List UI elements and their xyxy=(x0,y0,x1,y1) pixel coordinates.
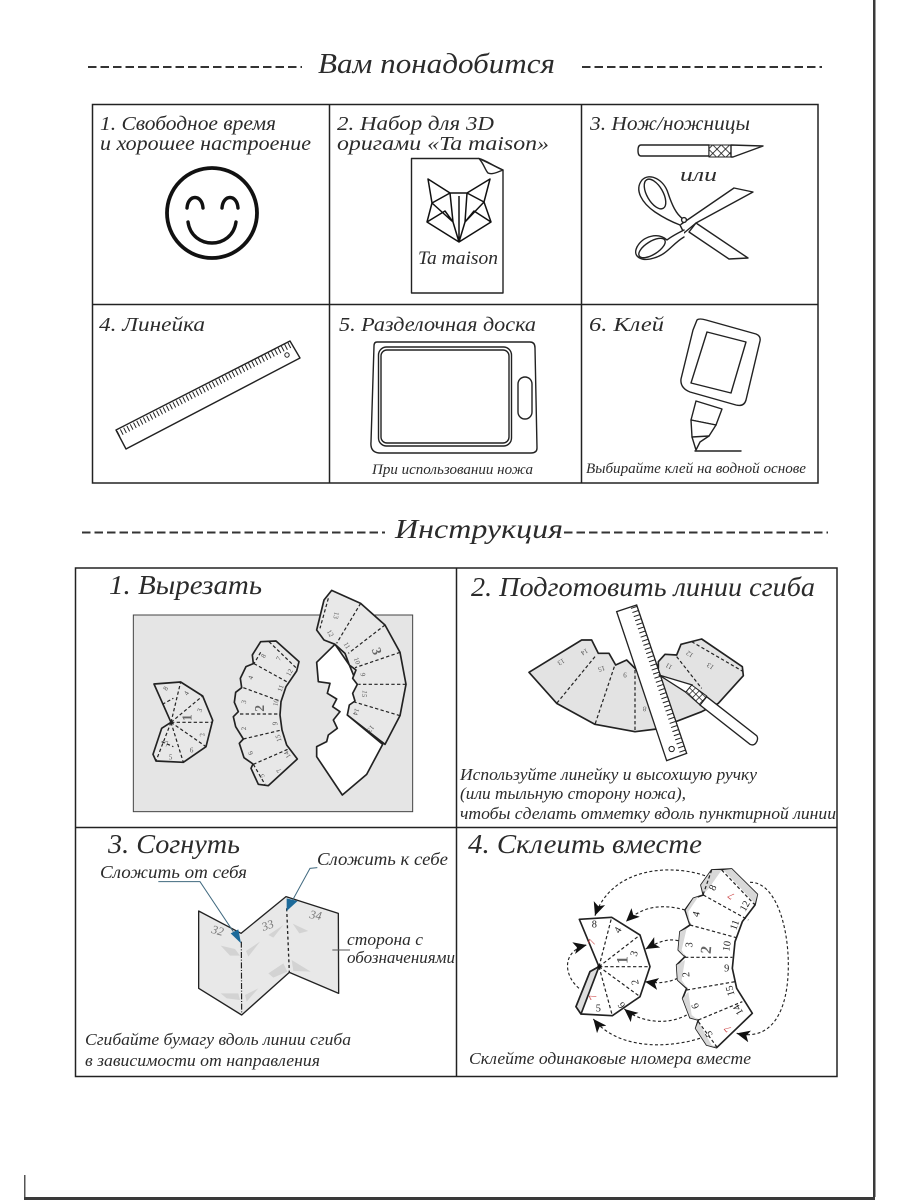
net 1: 2 xyxy=(198,732,207,737)
net 1: 7 xyxy=(587,938,599,947)
net 1: 8 xyxy=(592,920,597,931)
step 2 note: чтобы сделать отметку вдоль пунктирной линии xyxy=(460,804,836,823)
net 2: 2 xyxy=(698,945,715,955)
net 1 xyxy=(153,682,213,762)
heading: instructions: Инструкция xyxy=(394,514,563,544)
step 4: glue together: 4. Склеить вместе xyxy=(468,829,702,859)
net 3: 13 xyxy=(331,611,341,620)
step 2: prepare fold lines xyxy=(459,572,836,823)
heading: what you will need: Вам понадобится xyxy=(318,48,555,80)
item 3: knife and scissors: 3. Нож/ножницы xyxy=(589,113,750,135)
net 2: 2 xyxy=(681,971,693,978)
panel: instruction grid xyxy=(75,568,837,1076)
label: printed side xyxy=(347,930,455,967)
note: water-based glue: Выбирайте клей на водной основе xyxy=(586,461,806,477)
net 1: 1 xyxy=(179,714,194,721)
step 1: cut out: 1. Вырезать xyxy=(109,570,262,600)
step 3: fold: 3. Согнуть xyxy=(107,829,240,859)
scored paper net: 8 xyxy=(642,704,647,713)
illustration: numbered nets with arrows xyxy=(567,869,788,1048)
net 1: 4 xyxy=(182,689,191,697)
net 3: 15 xyxy=(360,690,369,698)
net 3: 10 xyxy=(352,656,362,666)
illustration: folded paper strip: 32 xyxy=(209,922,225,939)
net 2: 7 xyxy=(275,655,284,662)
step 2: prepare fold lines: 2. Подготовить линии сгиба xyxy=(471,572,815,602)
net 2: 3 xyxy=(240,699,248,704)
step 3: fold xyxy=(85,829,455,1070)
note: when using a knife: При использовании ножа xyxy=(371,462,533,478)
icon: glue bottle xyxy=(681,319,760,451)
icon: cutting board xyxy=(371,342,537,453)
icon: smiley face xyxy=(167,168,257,258)
item 2: origami kit xyxy=(337,113,549,293)
scored paper net xyxy=(529,639,743,732)
icon: knife xyxy=(659,675,758,745)
item 3: knife and scissors xyxy=(589,113,763,261)
net 3: 12 xyxy=(325,628,336,639)
illustration: folded paper strip xyxy=(158,868,350,1015)
net 1: 1 xyxy=(615,956,632,964)
net 2: 8 xyxy=(259,652,268,660)
net 1 xyxy=(576,917,650,1016)
net 1: 8 xyxy=(162,685,171,692)
net 1: 4 xyxy=(612,925,625,935)
item 2: origami kit: оригами «Ta maison» xyxy=(337,133,549,155)
step 2 note: Используйте линейку и высохшую ручку xyxy=(459,765,757,784)
blue fold markers xyxy=(158,868,317,943)
step 3 note xyxy=(85,1030,351,1070)
net 2: 11 xyxy=(728,919,742,932)
net 2: 10 xyxy=(721,940,734,952)
panel: supplies grid xyxy=(92,104,818,483)
item 6: glue: 6. Клей xyxy=(589,314,664,336)
icon: ruler xyxy=(617,605,687,761)
item 2: origami kit: 2. Набор для 3D xyxy=(337,113,495,135)
net 1: 3 xyxy=(195,707,204,713)
illustration: folded paper strip: 34 xyxy=(308,907,323,923)
net 2: 12 xyxy=(738,899,753,914)
net 2: 10 xyxy=(271,698,281,707)
net 2: 6 xyxy=(690,1002,702,1010)
net 3: 13 xyxy=(365,723,376,734)
item 6: glue xyxy=(586,314,806,477)
label: fold away: Сложить от себя xyxy=(100,862,247,882)
net 2: 7 xyxy=(275,766,283,774)
label: fold toward: Сложить к себе xyxy=(317,849,448,869)
net 2: 7 xyxy=(723,1023,734,1034)
item 1: free time and good mood: 1. Свободное время xyxy=(100,113,276,135)
scored paper net: 12 xyxy=(684,648,695,659)
net 1: 2 xyxy=(630,979,642,986)
step 2 note xyxy=(459,765,836,823)
net 2: 9 xyxy=(724,964,729,975)
grey cutting sheet with three nets xyxy=(133,590,413,812)
step 1: cut out xyxy=(109,570,413,812)
net 1: 6 xyxy=(190,747,194,755)
scored paper net: 9 xyxy=(623,670,627,678)
net 3: 11 xyxy=(342,641,352,651)
item 4: ruler: 4. Линейка xyxy=(99,314,205,336)
net 2: 2 xyxy=(240,726,248,731)
net 1: 7 xyxy=(588,992,600,1001)
net 1: 5 xyxy=(596,1004,601,1015)
illustration: folded paper strip: 33 xyxy=(259,917,276,934)
step 3 note: Сгибайте бумагу вдоль линии сгиба xyxy=(85,1030,351,1049)
net 3: 9 xyxy=(358,672,367,678)
step 4: glue together xyxy=(468,829,788,1068)
step 4 note: Склейте одинаковые нломера вместе xyxy=(469,1049,751,1068)
icon: paper sheet with fox logo xyxy=(412,158,503,293)
net 2: 5 xyxy=(703,1029,716,1039)
icon: paper sheet with fox logo: Ta maison xyxy=(418,248,498,269)
icon: craft knife xyxy=(638,145,763,157)
net 2: 14 xyxy=(282,749,293,760)
label: printed side: обозначениями xyxy=(347,948,455,967)
dashed arrows xyxy=(567,870,788,1045)
net 2: 15 xyxy=(274,733,284,743)
net 2: 4 xyxy=(691,910,703,918)
scored paper net: 13 xyxy=(705,660,716,671)
net 2: 8 xyxy=(707,883,719,893)
item 3: knife and scissors: или xyxy=(680,165,717,186)
item 5: cutting board: 5. Разделочная доска xyxy=(339,314,536,336)
net 2: 12 xyxy=(284,667,295,678)
net 2: 4 xyxy=(246,674,255,681)
net 2 xyxy=(677,869,757,1048)
scored paper net: 13 xyxy=(556,657,566,667)
net 2 xyxy=(233,641,299,786)
net 2: 3 xyxy=(684,942,696,948)
step 3 note: в зависимости от направления xyxy=(85,1051,320,1070)
net 3 xyxy=(317,590,406,795)
net 3: 3 xyxy=(369,645,385,657)
net 3: 14 xyxy=(351,707,361,717)
net 2: 6 xyxy=(246,750,255,756)
label: printed side: сторона с xyxy=(347,930,423,949)
net 2: 5 xyxy=(258,772,267,780)
net 2: 9 xyxy=(271,721,279,725)
net 2: 2 xyxy=(252,705,267,712)
item 1: free time and good mood: и хорошее настроение xyxy=(100,133,311,155)
net 1: 3 xyxy=(629,950,641,958)
net 2: 11 xyxy=(276,683,286,693)
net 2: 7 xyxy=(726,889,737,901)
net 1: 5 xyxy=(169,753,173,761)
scored paper net: 11 xyxy=(664,661,674,671)
item 4: ruler xyxy=(99,314,300,449)
net 1: 7 xyxy=(165,741,169,749)
icon: ruler xyxy=(116,341,300,449)
item 5: cutting board xyxy=(339,314,537,478)
icon: scissors xyxy=(636,176,753,261)
net 2: 14 xyxy=(731,1002,746,1017)
step 2 note: (или тыльную сторону ножа), xyxy=(460,784,686,803)
item 1: free time and good mood xyxy=(100,113,311,258)
illustration: ruler and knife scoring net xyxy=(529,605,758,761)
scored paper net: 14 xyxy=(579,647,589,657)
net 2: 15 xyxy=(724,984,738,997)
scored paper net: 15 xyxy=(597,664,606,673)
net 1: 6 xyxy=(616,999,628,1010)
